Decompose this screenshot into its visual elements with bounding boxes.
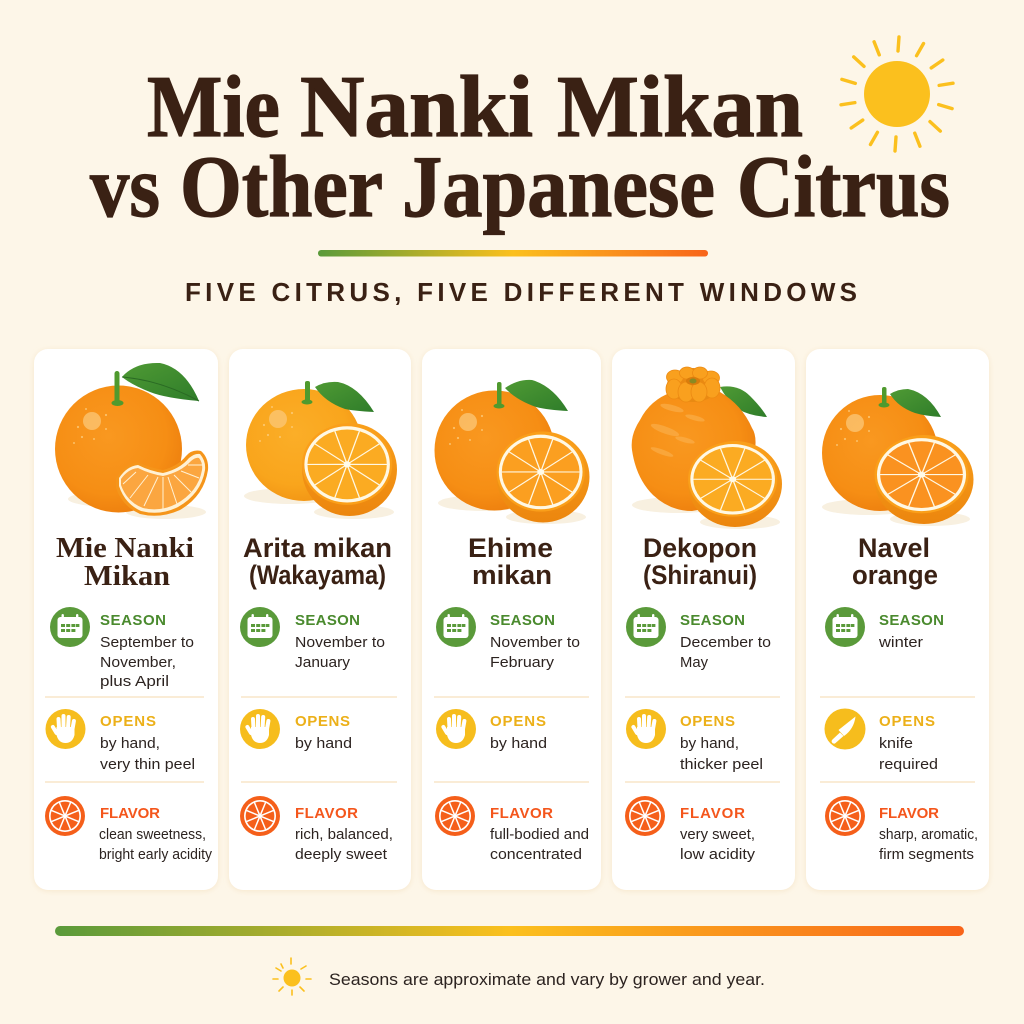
- panel: Navel orange: [806, 349, 989, 890]
- illustration: Navel orange: [822, 387, 974, 526]
- panel: Arita mikan: [229, 349, 411, 890]
- row: flavor: firm segments: [879, 846, 974, 863]
- row: opens: required: [879, 756, 938, 773]
- row: flavor: FLAVOR: [879, 805, 939, 822]
- title: Other: [180, 139, 383, 236]
- name: Ehime: [468, 533, 553, 563]
- row: season: [825, 607, 944, 651]
- row: season: September to: [100, 634, 194, 651]
- row: opens: by hand,: [680, 735, 739, 752]
- row: flavor: full-bodied and: [490, 826, 589, 843]
- name: mikan: [472, 560, 552, 590]
- panel: Dekopon: [612, 349, 795, 890]
- row: opens: OPENS: [680, 713, 735, 730]
- row: opens: OPENS: [100, 713, 156, 730]
- row: opens: [626, 709, 763, 773]
- row: flavor: bright early acidity: [99, 846, 212, 863]
- title: vs: [90, 139, 160, 236]
- row: opens: [436, 709, 547, 752]
- name: [643, 533, 757, 590]
- row: season: SEASON: [680, 612, 745, 629]
- row: season: [240, 607, 385, 671]
- illustration: Dekopon: [632, 367, 782, 529]
- name: [852, 533, 938, 590]
- panel: Mie Nanki Mikan: [34, 349, 218, 890]
- title: Japanese: [402, 139, 715, 236]
- title: Nanki: [300, 59, 533, 156]
- title: Mie: [147, 59, 280, 156]
- title: Citrus: [737, 139, 950, 236]
- row: season: February: [490, 654, 555, 671]
- row: flavor: rich, balanced,: [295, 826, 393, 843]
- row: season: SEASON: [100, 612, 166, 629]
- name: orange: [852, 560, 938, 590]
- row: flavor: deeply sweet: [295, 846, 388, 863]
- row: season: November to: [295, 634, 385, 651]
- row: opens: very thin peel: [100, 756, 195, 773]
- row: season: winter: [878, 634, 923, 651]
- row: season: [626, 607, 771, 671]
- footnote: Seasons are approximate and vary by grower and year.: [329, 971, 765, 989]
- row: season: [436, 607, 580, 671]
- row: opens: [46, 709, 195, 773]
- icon: small sun: [273, 958, 311, 995]
- row: season: November,: [100, 654, 176, 671]
- row: season: [50, 607, 194, 690]
- bottom gradient rule: [55, 926, 964, 936]
- name: Mie Nanki: [56, 532, 194, 564]
- row: season: November to: [490, 634, 580, 651]
- name: [56, 532, 194, 592]
- row: flavor: FLAVOR: [100, 805, 160, 822]
- name: [243, 533, 392, 590]
- row: flavor: [825, 796, 978, 863]
- name: Arita mikan: [243, 533, 392, 563]
- row: opens: knife: [879, 735, 913, 752]
- row: flavor: sharp, aromatic,: [879, 826, 978, 843]
- row: flavor: low acidity: [680, 846, 756, 863]
- name: (Wakayama): [249, 560, 386, 590]
- row: flavor: [625, 796, 756, 863]
- row: flavor: very sweet,: [680, 826, 755, 843]
- row: opens: by hand: [490, 735, 547, 752]
- row: flavor: [240, 796, 393, 863]
- row: opens: OPENS: [490, 713, 546, 730]
- title: Mikan: [557, 59, 803, 156]
- subtitle: FIVE CITRUS, FIVE DIFFERENT WINDOWS: [185, 277, 857, 307]
- row: flavor: clean sweetness,: [99, 826, 206, 843]
- row: opens: by hand,: [100, 735, 160, 752]
- illustration: Ehime mikan: [434, 380, 590, 524]
- title gradient rule: [318, 250, 708, 256]
- name: Dekopon: [643, 533, 757, 563]
- row: opens: OPENS: [879, 713, 935, 730]
- panel: Ehime mikan: [422, 349, 601, 890]
- row: opens: [240, 709, 352, 752]
- illustration: mikan with segment: [55, 363, 208, 519]
- icon: sun: [841, 37, 953, 151]
- row: opens: [824, 708, 938, 773]
- row: flavor: FLAVOR: [295, 805, 358, 822]
- name: Navel: [858, 533, 930, 563]
- name: (Shiranui): [643, 560, 757, 590]
- row: season: December to: [680, 634, 771, 651]
- row: flavor: FLAVOR: [490, 805, 553, 822]
- row: season: SEASON: [879, 612, 944, 629]
- row: opens: thicker peel: [680, 756, 763, 773]
- row: flavor: FLAVOR: [680, 805, 745, 822]
- name: [468, 533, 553, 590]
- row: season: May: [680, 654, 708, 671]
- row: flavor: [435, 796, 589, 863]
- illustration: Arita mikan: [244, 381, 397, 519]
- name: Mikan: [84, 560, 170, 592]
- row: season: plus April: [100, 673, 169, 690]
- row: flavor: [45, 796, 212, 863]
- row: flavor: concentrated: [490, 846, 582, 863]
- row: season: January: [295, 654, 351, 671]
- row: season: SEASON: [490, 612, 555, 629]
- row: season: SEASON: [295, 612, 360, 629]
- title: [90, 59, 950, 236]
- row: opens: OPENS: [295, 713, 350, 730]
- row: opens: by hand: [295, 735, 352, 752]
